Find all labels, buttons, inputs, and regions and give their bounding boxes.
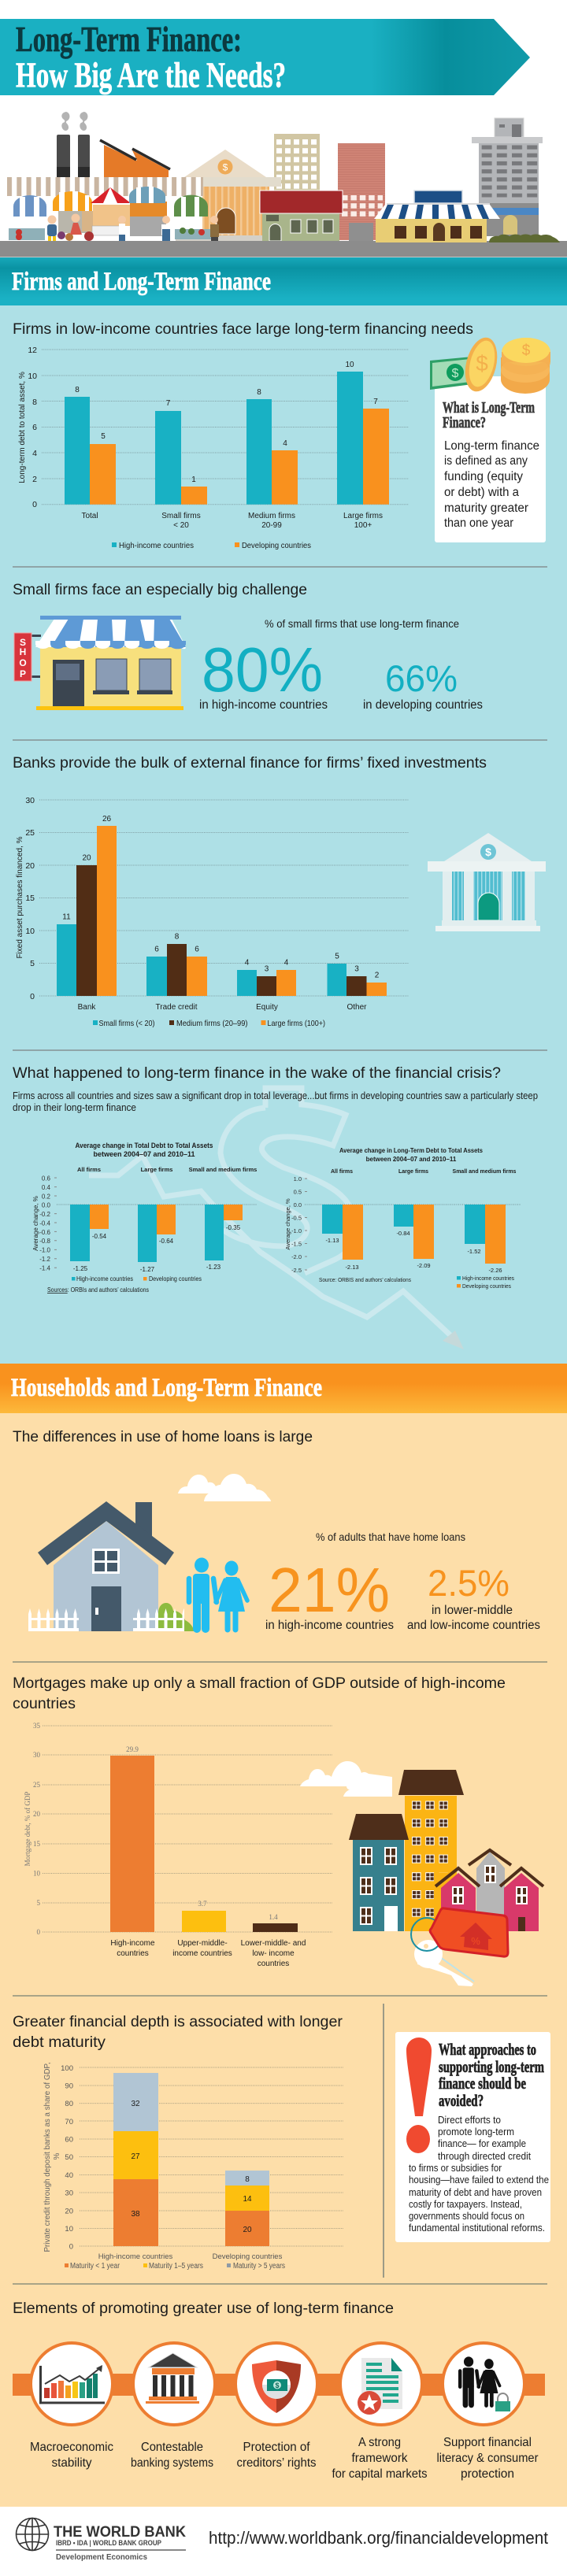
heading: Banks provide the bulk of external finance for firms’ fixed investments: [13, 755, 487, 772]
bar chart: total debt to total assets: -1.4: [39, 1264, 51, 1272]
bar chart: mortgage debt: Upper-middle-: [177, 1939, 228, 1948]
bar chart: fixed asset purchases financed: 0: [30, 992, 35, 1001]
stacked bar chart: debt maturity: 60: [65, 2135, 73, 2145]
stat: 80%: 80%: [202, 635, 323, 705]
bar chart: total debt to total assets: -0.4: [39, 1220, 51, 1227]
shop sign: P: [20, 668, 26, 679]
callout body: promote long-term: [438, 2126, 514, 2137]
bar chart: total debt to total assets: Average change in Total Debt to Total Assets: [76, 1142, 213, 1149]
bar chart: long-term debt to total asset: Total: [81, 512, 98, 520]
bar chart: mortgage debt: countries: [258, 1960, 289, 1968]
stat: 66%: 66%: [385, 657, 458, 699]
bar chart: fixed asset purchases financed: 20: [25, 861, 35, 871]
label: [131, 2441, 213, 2470]
bar chart: long-term debt to total asset: 7: [166, 399, 171, 408]
icon: bank: [146, 2353, 199, 2404]
callout body: Long-term finance: [444, 439, 539, 453]
icon: growth chart: [41, 2365, 105, 2403]
tall beige building: [274, 134, 320, 191]
callout: approaches to avoid: [395, 2032, 550, 2242]
bar chart: long-term debt to total asset: 20-99: [261, 521, 282, 530]
callout body: fundamental institutional reforms.: [409, 2222, 545, 2234]
label: stability: [52, 2456, 91, 2470]
legend: High-income countries: [76, 1275, 133, 1282]
bar chart: long-term debt to total asset: 1: [191, 476, 196, 484]
stacked bar chart: debt maturity: 80: [65, 2100, 73, 2108]
stacked bar chart: debt maturity: 8: [245, 2175, 250, 2184]
bar chart: fixed asset purchases financed: 25: [25, 828, 35, 838]
price tag: [430, 1908, 508, 1956]
url: http://www.worldbank.org/financialdevelopment: [209, 2528, 548, 2548]
bar chart: long-term debt to total asset: 12: [28, 346, 37, 355]
legend: [112, 541, 311, 550]
callout body: housing—have failed to extend the: [409, 2174, 549, 2186]
shop sign: O: [19, 657, 27, 668]
bar chart: long-term debt to total assets: -1.52: [467, 1248, 481, 1255]
road: [0, 241, 567, 257]
callout body: or debt) with a: [444, 486, 519, 499]
stacked bar chart: debt maturity: 100: [61, 2064, 73, 2073]
bar chart: fixed asset purchases financed: Equity: [256, 1003, 278, 1012]
legend: Developing countries: [462, 1282, 511, 1290]
bar chart: long-term debt to total asset: 8: [75, 386, 80, 394]
bar chart: total debt to total assets: -1.27: [140, 1266, 155, 1273]
bar chart: long-term debt to total asset: 10: [28, 372, 37, 381]
bar chart: fixed asset purchases financed: 6: [154, 945, 159, 954]
panel: mortgages: [13, 1675, 543, 1986]
stat caption: % of small firms that use long-term finance: [265, 617, 459, 630]
element: strong framework: [332, 2343, 427, 2481]
stacked bar chart: debt maturity: 50: [65, 2153, 73, 2162]
label: literacy & consumer: [436, 2452, 539, 2465]
callout body: [444, 439, 539, 530]
bar chart: long-term debt to total asset: [18, 346, 409, 550]
bar chart: mortgage debt: 25: [33, 1781, 41, 1789]
bar chart: total debt to total assets: -1.25: [73, 1265, 88, 1272]
bar chart: mortgage debt: 15: [33, 1840, 41, 1848]
legend: [93, 1019, 325, 1028]
label: A strong: [358, 2436, 401, 2449]
bar chart: long-term debt to total assets: -2.5: [291, 1267, 302, 1274]
bar chart: total debt to total assets: 0.2: [42, 1194, 51, 1200]
callout body: Direct efforts to: [438, 2114, 501, 2126]
label: [332, 2436, 427, 2481]
label: Contestable: [141, 2441, 203, 2454]
callout body: funding (equity: [444, 470, 523, 483]
stat: 21%: 21%: [269, 1555, 390, 1625]
icon: shield: [252, 2360, 301, 2413]
yellow striped-awning shop: [374, 191, 500, 242]
bar chart: fixed asset purchases financed: Other: [346, 1003, 367, 1012]
callout body: maturity greater: [444, 502, 528, 515]
bar chart: total debt to total assets: 0.6: [42, 1175, 51, 1183]
bar chart: mortgage debt: 29.9: [126, 1745, 139, 1753]
panel: financial crisis: [13, 1065, 538, 1349]
label: [30, 2441, 113, 2470]
stacked bar chart: debt maturity: 0: [69, 2242, 73, 2252]
bar chart: fixed asset purchases financed: Trade credit: [156, 1003, 198, 1012]
heading: Small firms face an especially big challenge: [13, 582, 307, 598]
icon: shop: [14, 616, 186, 710]
stacked bar chart: debt maturity: 30: [65, 2189, 73, 2198]
heading: countries: [13, 1696, 76, 1712]
label: Protection of: [243, 2441, 310, 2454]
bar chart: long-term debt to total asset: 4: [32, 449, 37, 458]
bar chart: mortgage debt: Mortgage debt, % of GDP: [24, 1792, 32, 1866]
heading: What happened to long-term finance in the wake of the financial crisis?: [13, 1065, 501, 1082]
icon: banknote and coins: $: [452, 367, 459, 380]
bar chart: mortgage debt: 35: [33, 1722, 41, 1730]
stacked bar chart: debt maturity: 27: [131, 2152, 140, 2161]
bar chart: mortgage debt: 10: [33, 1869, 41, 1877]
bar chart: long-term debt to total asset: 100+: [354, 521, 372, 530]
bar chart: fixed asset purchases financed: 4: [245, 959, 250, 967]
bar chart: mortgage debt: [24, 1722, 332, 1968]
label: creditors’ rights: [236, 2456, 317, 2470]
illustration: houses and key: [349, 1770, 543, 1986]
bar chart: long-term debt to total asset: 2: [32, 475, 37, 484]
bar chart: fixed asset purchases financed: 3: [354, 965, 359, 973]
legend: Developing countries: [149, 1275, 202, 1282]
gray office tower: [472, 118, 543, 236]
icon: couple with padlock: [460, 2356, 510, 2411]
price tag: %: [471, 1935, 480, 1947]
stacked bar chart: debt maturity: 20: [243, 2226, 252, 2234]
bar chart: total debt to total assets: -0.8: [39, 1238, 51, 1245]
label: protection: [461, 2467, 514, 2481]
callout body: governments should focus on: [409, 2210, 524, 2222]
key: [411, 1918, 474, 1986]
bar chart: long-term debt to total asset: Large firms: [343, 512, 383, 520]
bar chart: mortgage debt: 30: [33, 1751, 41, 1759]
shop sign: S: [20, 637, 26, 648]
section heading: Firms and Long-Term Finance: [12, 268, 271, 296]
panel: elements of promoting long-term finance: [13, 2300, 545, 2481]
icon: house: [28, 1501, 194, 1631]
bar chart: fixed asset purchases financed: 8: [175, 932, 180, 942]
bar chart: long-term debt to total assets: -2.13: [345, 1264, 359, 1271]
label: banking systems: [131, 2456, 213, 2470]
heading: [13, 1675, 506, 1712]
bar chart: total debt to total assets: -1.23: [206, 1264, 221, 1271]
intro text: drop in their long-term finance: [13, 1102, 136, 1113]
callout body: [409, 2114, 549, 2234]
element: financial literacy: [436, 2343, 539, 2481]
bar chart: total debt to total assets: [32, 1142, 257, 1294]
market stalls: [9, 187, 216, 241]
panel: banks provide external finance: [13, 755, 546, 1028]
bar chart: mortgage debt: Lower-middle- and: [241, 1939, 306, 1948]
bar chart: total debt to total assets: -0.35: [226, 1224, 241, 1231]
bar chart: long-term debt to total assets: -2.09: [417, 1262, 431, 1269]
bar chart: fixed asset purchases financed: 3: [265, 965, 269, 973]
stat label: in high-income countries: [265, 1619, 394, 1632]
bar chart: total debt to total assets: 0.4: [42, 1184, 51, 1191]
label: Macroeconomic: [30, 2441, 113, 2454]
orange band: [13, 2374, 545, 2396]
legend: [72, 1275, 202, 1282]
bank building: $: [223, 162, 228, 173]
market vendors: [47, 214, 219, 242]
bar chart: long-term debt to total asset: 8: [32, 398, 37, 407]
bar chart: long-term debt to total asset: 7: [373, 398, 378, 406]
stat label: in high-income countries: [199, 698, 328, 712]
bar chart: long-term debt to total asset: 10: [345, 361, 354, 369]
y axis title: Fixed asset purchases financed, %: [16, 836, 24, 959]
heading: Greater financial depth is associated with longer: [13, 2014, 343, 2030]
gray garage door: [349, 223, 373, 241]
bar chart: long-term debt to total asset: 4: [283, 439, 287, 448]
icon: shield: $: [275, 2382, 280, 2389]
stat label: and low-income countries: [407, 1619, 540, 1632]
callout body: maturity of debt and have proven: [409, 2186, 542, 2198]
bar chart: mortgage debt: 0: [36, 1928, 41, 1936]
bar chart: mortgage debt: countries: [117, 1949, 149, 1958]
source: Sources: ORBIs and authors’ calculations: [47, 1286, 149, 1294]
bar chart: long-term debt to total assets: Large firms: [398, 1169, 428, 1175]
bar chart: total debt to total assets: -0.54: [92, 1233, 107, 1240]
label: [236, 2441, 317, 2470]
watermark: dollar sign and falling arrow: [89, 1088, 464, 1349]
bar chart: fixed asset purchases financed: 6: [195, 945, 199, 954]
bar chart: fixed asset purchases financed: [16, 796, 409, 1028]
bank building: [176, 150, 281, 243]
footer: [16, 2518, 548, 2562]
logo: World Bank: Development Economics: [56, 2552, 147, 2562]
stacked bar chart: debt maturity: Private credit through deposit banks as a share of GDP,: [43, 2062, 52, 2252]
legend: Large firms (100+): [268, 1019, 325, 1028]
callout: what is long-term finance: [430, 334, 550, 542]
red roof house: [260, 191, 343, 242]
bar chart: fixed asset purchases financed: 30: [25, 796, 35, 805]
bar chart: long-term debt to total assets: -1.5: [291, 1241, 302, 1247]
bar chart: mortgage debt: income countries: [172, 1949, 232, 1958]
icon: couple: [189, 1557, 247, 1630]
stacked bar chart: debt maturity: 20: [65, 2208, 73, 2215]
bar chart: long-term debt to total assets: -1.0: [291, 1227, 302, 1234]
bar chart: long-term debt to total assets: 0.0: [294, 1201, 302, 1208]
stacked bar chart: debt maturity: %: [53, 2152, 61, 2160]
bar chart: total debt to total assets: -0.6: [39, 1229, 51, 1236]
bar chart: long-term debt to total assets: [284, 1147, 521, 1290]
stacked bar chart: debt maturity: 90: [65, 2082, 73, 2091]
bar chart: long-term debt to total asset: 5: [101, 432, 106, 441]
callout body: to firms or subsidies for: [409, 2162, 502, 2174]
bar chart: long-term debt to total assets: Average change in Long-Term Debt to Total Assets: [339, 1147, 484, 1154]
bar chart: total debt to total assets: Small and medium firms: [189, 1166, 257, 1173]
bar chart: total debt to total assets: -1.0: [39, 1247, 51, 1253]
y axis title: Long-term debt to total asset, %: [18, 372, 27, 483]
bar chart: fixed asset purchases financed: 2: [375, 972, 380, 979]
heading: The differences in use of home loans is large: [13, 1429, 313, 1445]
callout heading: finance should be: [439, 2074, 526, 2093]
callout heading: avoided?: [439, 2091, 484, 2110]
stacked bar chart: debt maturity: 14: [243, 2195, 252, 2204]
logo: World Bank: [16, 2518, 186, 2562]
panel: home loans: [13, 1429, 540, 1632]
logo: World Bank: IBRD • IDA | WORLD BANK GROUP: [56, 2539, 162, 2548]
bar chart: long-term debt to total assets: -2.26: [488, 1267, 502, 1274]
callout heading: [439, 2040, 544, 2110]
bar chart: fixed asset purchases financed: 26: [102, 815, 111, 824]
section band: households: [0, 1364, 567, 1413]
bar chart: fixed asset purchases financed: Bank: [78, 1003, 96, 1012]
bar chart: long-term debt to total asset: < 20: [173, 521, 189, 530]
section background: households: [0, 1413, 567, 2507]
bar chart: total debt to total assets: between 2004–07 and 2010–11: [93, 1150, 195, 1158]
heading: Elements of promoting greater use of long-term finance: [13, 2300, 394, 2317]
callout body: finance— for example: [438, 2137, 526, 2149]
bar chart: fixed asset purchases financed: 20: [82, 853, 91, 863]
bar chart: long-term debt to total assets: between 2004–07 and 2010–11: [366, 1156, 457, 1163]
title line 1: Long-Term Finance:: [16, 20, 242, 59]
legend: High-income countries: [119, 541, 194, 550]
section background: firms: [0, 305, 567, 1364]
icon: banknote and coins: $: [476, 351, 488, 376]
title line 2: How Big Are the Needs?: [16, 55, 286, 94]
bar chart: long-term debt to total assets: -2.0: [291, 1253, 302, 1260]
pink building: [338, 143, 385, 240]
stat label: in developing countries: [363, 698, 483, 712]
bar chart: mortgage debt: High-income: [110, 1939, 155, 1948]
legend: Developing countries: [242, 541, 311, 550]
panel: financial depth: [13, 2014, 343, 2271]
legend: [457, 1275, 514, 1290]
bar chart: long-term debt to total assets: 0.5: [294, 1189, 302, 1195]
heading: debt maturity: [13, 2034, 106, 2051]
bar chart: long-term debt to total assets: Average change, %: [284, 1198, 291, 1250]
bar chart: total debt to total assets: Average change, %: [32, 1196, 39, 1251]
clouds: [178, 1474, 271, 1501]
bar chart: total debt to total assets: -0.2: [39, 1211, 51, 1218]
hedge: [489, 235, 560, 242]
legend: [65, 2262, 285, 2271]
source: Source: ORBIS and authors’ calculations: [319, 1276, 411, 1283]
bar chart: total debt to total assets: 0.0: [42, 1201, 51, 1209]
label: [436, 2436, 539, 2481]
shop sign: H: [20, 646, 26, 657]
stacked bar chart: debt maturity: 10: [65, 2225, 73, 2234]
bar chart: long-term debt to total asset: 8: [257, 388, 261, 397]
label: framework: [351, 2452, 408, 2465]
legend: High-income countries: [462, 1275, 514, 1282]
callout: what is long-term finance: Finance?: [443, 414, 486, 431]
clouds: [300, 1761, 392, 1797]
element: contestable banking systems: [131, 2343, 215, 2470]
stacked bar chart: debt maturity: 40: [65, 2171, 73, 2180]
element: macroeconomic stability: [30, 2343, 113, 2470]
bar chart: long-term debt to total asset: Medium firms: [248, 512, 295, 520]
bar chart: long-term debt to total assets: All firms: [331, 1169, 353, 1175]
bar chart: fixed asset purchases financed: 11: [62, 913, 71, 921]
bar chart: long-term debt to total asset: Small firms: [161, 512, 201, 520]
bar chart: fixed asset purchases financed: 4: [284, 959, 289, 967]
panel: long-term financing needs: [13, 321, 550, 550]
title banner: [0, 19, 530, 95]
stat: 2.5%: 2.5%: [428, 1562, 510, 1604]
callout body: through directed credit: [438, 2150, 531, 2162]
section band: firms: [0, 257, 567, 305]
panel: small firms challenge: [13, 582, 483, 712]
bar chart: long-term debt to total asset: 6: [32, 423, 37, 432]
bar chart: long-term debt to total assets: -0.84: [396, 1230, 410, 1237]
bar chart: long-term debt to total assets: -0.5: [291, 1214, 302, 1222]
bar chart: total debt to total assets: -0.64: [159, 1238, 174, 1245]
bar chart: long-term debt to total assets: Small and medium firms: [453, 1169, 517, 1175]
stacked bar chart: debt maturity: Developing countries: [213, 2252, 283, 2261]
callout body: costly for taxpayers. Instead,: [409, 2198, 522, 2210]
legend: Small firms (< 20): [99, 1019, 154, 1028]
intro text: [13, 1090, 538, 1113]
icon: banknote and coins: $: [522, 342, 531, 359]
bar chart: mortgage debt: 20: [33, 1810, 41, 1818]
legend: Maturity < 1 year: [70, 2262, 120, 2271]
icon: bank: $: [485, 846, 491, 858]
icon: banknote and coins: [430, 334, 550, 395]
bar chart: long-term debt to total assets: 1.0: [294, 1175, 302, 1183]
stat label: in lower-middle: [432, 1604, 513, 1617]
bar chart: mortgage debt: 3.7: [198, 1900, 207, 1908]
icon: document with star badge: [358, 2358, 402, 2415]
stat label: [407, 1604, 540, 1632]
section heading: Households and Long-Term Finance: [11, 1374, 322, 1402]
callout body: than one year: [444, 516, 513, 530]
factory: [57, 112, 170, 177]
legend: Maturity > 5 years: [233, 2262, 285, 2271]
bar chart: fixed asset purchases financed: 5: [335, 953, 339, 960]
icon: exclamation mark: [406, 2037, 432, 2153]
bar chart: fixed asset purchases financed: 10: [25, 927, 35, 936]
bar chart: fixed asset purchases financed: 5: [30, 959, 35, 968]
stacked bar chart: debt maturity: [43, 2062, 343, 2271]
stacked bar chart: debt maturity: 70: [65, 2118, 73, 2126]
stat caption: % of adults that have home loans: [316, 1530, 465, 1543]
bar chart: total debt to total assets: All firms: [77, 1166, 101, 1173]
stacked bar chart: debt maturity: 38: [131, 2210, 140, 2219]
legend: Maturity 1–5 years: [149, 2262, 203, 2271]
bar chart: long-term debt to total asset: 0: [32, 500, 37, 509]
icon: bank: [428, 833, 546, 931]
logo: World Bank: THE WORLD BANK: [54, 2524, 186, 2541]
market awning: [7, 177, 203, 196]
heading: Mortgages make up only a small fraction of GDP outside of high-income: [13, 1675, 506, 1692]
callout body: is defined as any: [444, 454, 528, 468]
illustration: city skyline and market: [0, 112, 567, 257]
bar chart: total debt to total assets: Large firms: [141, 1166, 172, 1173]
stacked bar chart: debt maturity: 32: [131, 2100, 140, 2108]
bar chart: long-term debt to total assets: -1.13: [325, 1237, 339, 1244]
label: for capital markets: [332, 2467, 427, 2481]
label: Support financial: [443, 2436, 532, 2449]
heading: Firms in low-income countries face large long-term financing needs: [13, 321, 473, 338]
legend: Medium firms (20–99): [176, 1019, 247, 1028]
element: protection of creditors' rights: [235, 2343, 317, 2470]
shop sign: [14, 633, 32, 681]
bar chart: fixed asset purchases financed: 15: [25, 894, 35, 903]
bar chart: mortgage debt: 5: [36, 1899, 41, 1907]
stacked bar chart: debt maturity: High-income countries: [98, 2252, 173, 2261]
bar chart: mortgage debt: low- income: [252, 1949, 295, 1958]
bar chart: mortgage debt: 1.4: [269, 1913, 278, 1921]
heading: [13, 2014, 343, 2051]
bar chart: total debt to total assets: -1.2: [39, 1256, 51, 1263]
